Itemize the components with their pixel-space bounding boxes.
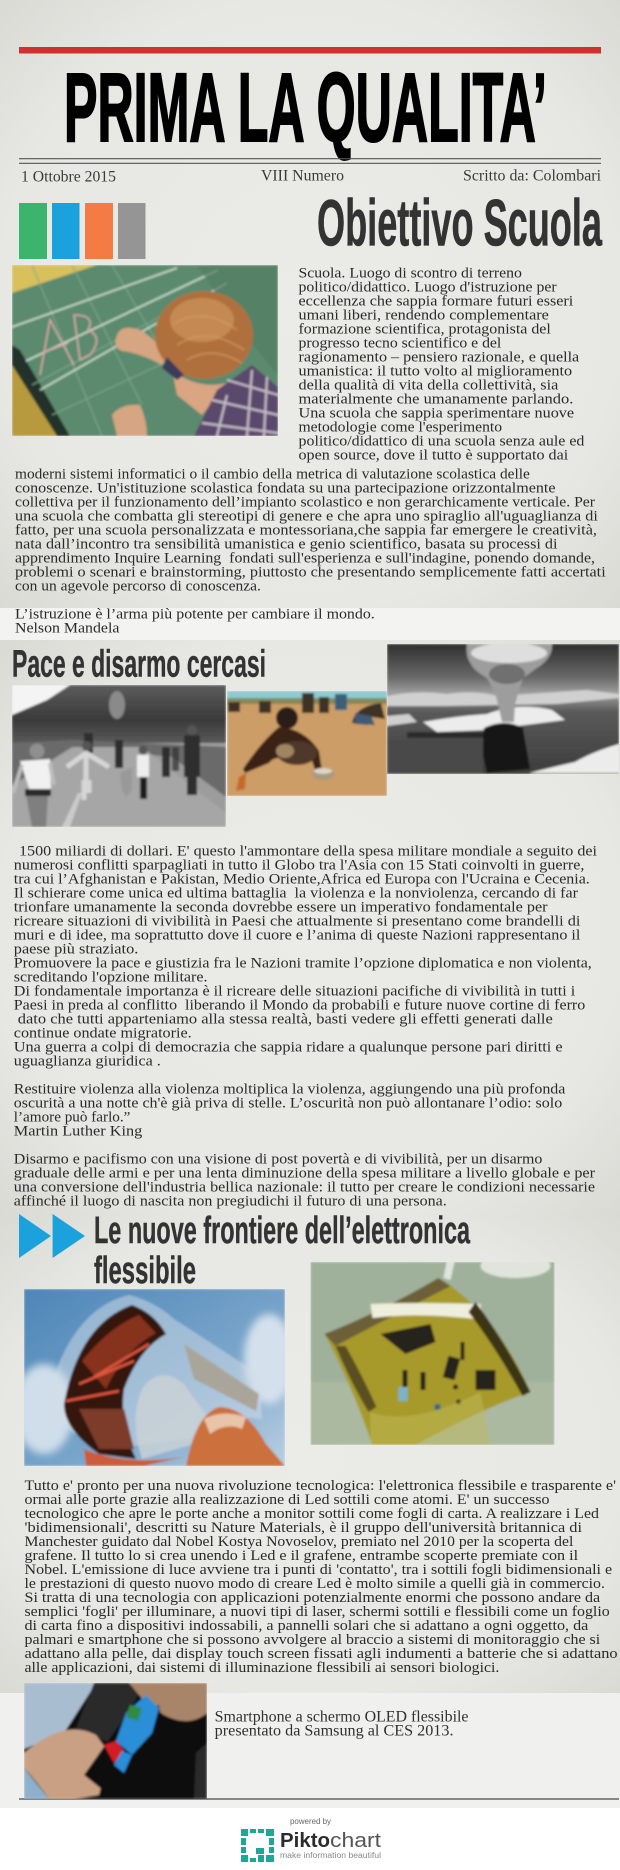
masthead rules: [19, 159, 601, 163]
photo: child at chalkboard: [12, 265, 278, 436]
text block: peace and disarmament: tra cui l’Afghanistan e Pakistan, Medio Oriente,Africa ed Europa con l'Ucraina e Cecenia.: [14, 872, 590, 888]
text block: peace and disarmament: Il schierare come unica ed ultima battaglia la violenza e la nonviolenza, cercando di far: [14, 886, 578, 902]
text block: peace and disarmament: Di fondamentale importanza è il ricreare delle situazioni pacifiche di vivibilità in tutti i: [14, 984, 575, 1000]
caption: Samsung smartphone: Smartphone a schermo OLED flessibile: [215, 1709, 469, 1726]
text block: peace and disarmament: continue ondate migratorie.: [14, 1026, 192, 1042]
text block: school continued: apprendimento Inquire Learning fondati sull'esperienza e sull'indagine, ponendo domande,: [15, 551, 595, 567]
text block: peace and disarmament: numerosi conflitti sparpagliati in tutto il Globo tra l'Asia con 15 Stati coinvolti in guerre,: [14, 858, 584, 874]
text block: school intro: umanistica: il tutto volto al miglioramento: [298, 363, 572, 379]
text block: peace and disarmament: muri e di idee, ma soprattutto dove il cuore e l’anima di queste Nazioni rappresentano il: [14, 928, 580, 944]
text block: flexible electronics: adattano alla pelle, dai display touch screen fissati agli indumenti a batterie che si adattano: [24, 1646, 618, 1662]
photo: children fleeing on road: [12, 685, 226, 827]
text block: flexible electronics: Si tratta di una tecnologia con applicazioni potenzialmente enormi che possono andare da: [24, 1590, 601, 1606]
text block: school continued: conoscenze. Un'istituzione scolastica fondata su una partecipazione orizzontalmente: [15, 481, 556, 497]
text block: flexible electronics: palmari e smartphone che si possono avvolgere al braccio a sistemi di monitoraggio che si: [24, 1632, 600, 1648]
icon: double arrow: [19, 1214, 85, 1258]
text block: flexible electronics: [24, 1478, 618, 1676]
photo: flexible transparent circuit roll: [24, 1289, 285, 1466]
text block: flexible electronics: 'bidimensionali', descritti su Nature Materials, è il gruppo dell'università britannica di: [24, 1520, 582, 1536]
text block: peace and disarmament: oscurità a una notte ch'è già priva di stelle. L’oscurità non può allontanare l’odio: solo: [14, 1096, 562, 1112]
heading: Pace e disarmo cercasi: Pace e disarmo cercasi: [12, 644, 266, 686]
icon: colour bars: [19, 203, 146, 259]
photo: Samsung flexible smartphone: [24, 1683, 207, 1799]
text block: school intro: politico/didattico di una scuola senza aule ed: [298, 433, 585, 449]
text block: school intro: ragionamento – pensiero razionale, e quella: [298, 349, 580, 365]
text block: school continued: collettiva per il funzionamento dell’impianto scolastico e non gerarchicamente verticale. Per: [15, 495, 595, 511]
text block: school intro: Una scuola che sappia sperimentare nuove: [298, 405, 574, 421]
text block: school intro: della qualità di vita della collettività, sia: [298, 377, 559, 393]
text block: school continued: una scuola che combatta gli stereotipi di genere e che apra uno spiraglio all'uguaglianza di: [15, 509, 598, 525]
text block: peace and disarmament: screditando l'opzione militare.: [14, 970, 207, 986]
photo: atomic mushroom cloud: [387, 644, 619, 774]
text block: peace and disarmament: dato che tutti apparteniamo alla stessa realtà, basti vedere gli effetti generati dalle: [18, 1012, 553, 1028]
text block: school intro: open source, dove il tutto è supportato dai: [298, 447, 568, 463]
text block: school intro: metodologie come l'esperimento: [298, 419, 502, 435]
text block: school intro: formazione scientifica, protagonista del: [298, 321, 551, 337]
footer: Piktochart logo: Pikto: [280, 1830, 330, 1852]
text block: flexible electronics: ormai alle porte grazie alla realizzazione di Led sottili come atomi. E' un successo: [24, 1492, 550, 1508]
text block: flexible electronics: semplici 'fogli' per illuminare, a nuovi tipi di laser, schermi sottili e flessibili come un foglio: [24, 1604, 610, 1620]
text block: school continued: [15, 467, 606, 595]
text block: school continued: fatto, per una scuola personalizzata e montessoriana,che sappia far emergere le creatività,: [15, 523, 597, 539]
text block: school continued: moderni sistemi informatici o il cambio della metrica di valutazione scolastica delle: [15, 467, 530, 483]
text block: peace and disarmament: Disarmo e pacifismo con una visione di post povertà e di vivibilità, per un disarmo: [14, 1152, 542, 1168]
text block: flexible electronics: Nobel. L'emissione di luce avviene tra i punti di 'contatto', tra i sottili fogli bidimensionali e: [24, 1562, 612, 1578]
text block: school intro: umani liberi, rendendo complementare: [298, 307, 549, 323]
text block: peace and disarmament: ricreare situazioni di vivibilità in Paesi che attualmente si presentano come brandelli di: [14, 914, 580, 930]
red top bar: [19, 47, 601, 54]
text block: school continued: problemi o scenari e brainstorming, piuttosto che presentando semplicemente fatti accertati: [15, 565, 606, 581]
text block: peace and disarmament: una conversione dell'industria bellica nazionale: il tutto per creare le condizioni necessarie: [14, 1180, 595, 1196]
caption: Samsung smartphone: presentato da Samsung al CES 2013.: [215, 1723, 454, 1740]
text block: flexible electronics: Manchester guidato dal Nobel Kostya Novoselov, premiato nel 2010 per la scoperta del: [24, 1534, 573, 1550]
text block: school intro: materialmente che umanamente parlando.: [298, 391, 573, 407]
text block: flexible electronics: tecnologico che apre le porte anche a monitor sottili come fogli di carta. A realizzare i Led: [24, 1506, 600, 1522]
text block: flexible electronics: Tutto e' pronto per una nuova rivoluzione tecnologica: l'elettronica flessibile e trasparente e': [24, 1478, 616, 1494]
quote: Nelson Mandela: L’istruzione è l’arma più potente per cambiare il mondo.: [15, 606, 375, 622]
date line: Scritto da: Colombari: [463, 168, 602, 185]
date line: [21, 168, 602, 186]
text block: peace and disarmament: Promuovere la pace e giustizia fra le Nazioni tramite l’opzione diplomatica e non violenta,: [14, 956, 592, 972]
divider line: [19, 1798, 619, 1800]
quote: Nelson Mandela: [15, 606, 375, 636]
text block: school continued: con un agevole percorso di conoscenza.: [15, 579, 261, 595]
text block: peace and disarmament: trionfare umanamente la seconda dovrebbe essere un imperativo fondamentale per: [14, 900, 548, 916]
text block: peace and disarmament: l’amore può farlo.”: [14, 1110, 130, 1126]
text block: school continued: nata dall’incontro tra sensibilità umanistica e genio scientifico, basata su processi di: [15, 537, 558, 553]
footer: Piktochart logo: chart: [330, 1830, 382, 1852]
footer: Piktochart logo: make information beautiful: [280, 1851, 381, 1860]
text block: flexible electronics: le prestazioni di questo nuovo modo di creare Led è molto simile a quelli già in commercio.: [24, 1576, 605, 1592]
text block: peace and disarmament: [14, 844, 597, 1210]
text block: school intro: politico/didattico. Luogo d'istruzione per: [298, 279, 557, 295]
date line: VIII Numero: [261, 168, 344, 185]
text block: peace and disarmament: graduale delle armi e per una lenta diminuzione della spesa militare a livello globale e per: [14, 1166, 595, 1182]
date line: 1 Ottobre 2015: [21, 169, 116, 186]
text block: flexible electronics: alle applicazioni, dai sistemi di illuminazione flessibili ai sensori biologici.: [24, 1660, 499, 1676]
text block: school intro: [298, 265, 585, 463]
caption: Samsung smartphone: [215, 1709, 469, 1740]
text block: peace and disarmament: uguaglianza giuridica .: [14, 1054, 161, 1070]
text block: peace and disarmament: Paesi in preda al conflitto liberando il Mondo da probabili e future nuove cortine di ferro: [14, 998, 585, 1014]
text block: peace and disarmament: paese più straziato.: [14, 942, 138, 958]
text block: flexible electronics: di carta fino a dispositivi indossabili, a pannelli solari che si adattano a ogni oggetto, da: [24, 1618, 589, 1634]
text block: school intro: Scuola. Luogo di scontro di terreno: [298, 265, 522, 281]
text block: peace and disarmament: 1500 miliardi di dollari. E' questo l'ammontare della spesa militare mondiale a seguito dei: [19, 844, 597, 860]
text block: peace and disarmament: Una guerra a colpi di democrazia che sappia ridare a qualunque persone pari diritti e: [14, 1040, 563, 1056]
text block: peace and disarmament: Restituire violenza alla violenza moltiplica la violenza, aggiungendo una più profonda: [14, 1082, 566, 1098]
heading: Le nuove frontiere: [94, 1210, 471, 1292]
text block: peace and disarmament: Martin Luther King: [14, 1124, 142, 1140]
quote: Nelson Mandela: Nelson Mandela: [15, 620, 120, 636]
heading: Le nuove frontiere: flessibile: [94, 1250, 196, 1292]
text block: school intro: eccellenza che sappia formare futuri esseri: [298, 293, 573, 309]
text block: peace and disarmament: affinché il luogo di nascita non pregiudichi il futuro di una persona.: [14, 1194, 447, 1210]
text block: flexible electronics: grafene. Il tutto lo si crea unendo i Led e il grafene, entrambe scoperte premiate con il: [24, 1548, 578, 1564]
footer: Piktochart logo: [241, 1817, 382, 1862]
photo: starving child in sand: [227, 691, 387, 796]
text block: school intro: progresso tecno scientifico e del: [298, 335, 501, 351]
photo: yellow flexible circuit: [310, 1262, 554, 1445]
footer: Piktochart logo: powered by: [290, 1817, 331, 1826]
